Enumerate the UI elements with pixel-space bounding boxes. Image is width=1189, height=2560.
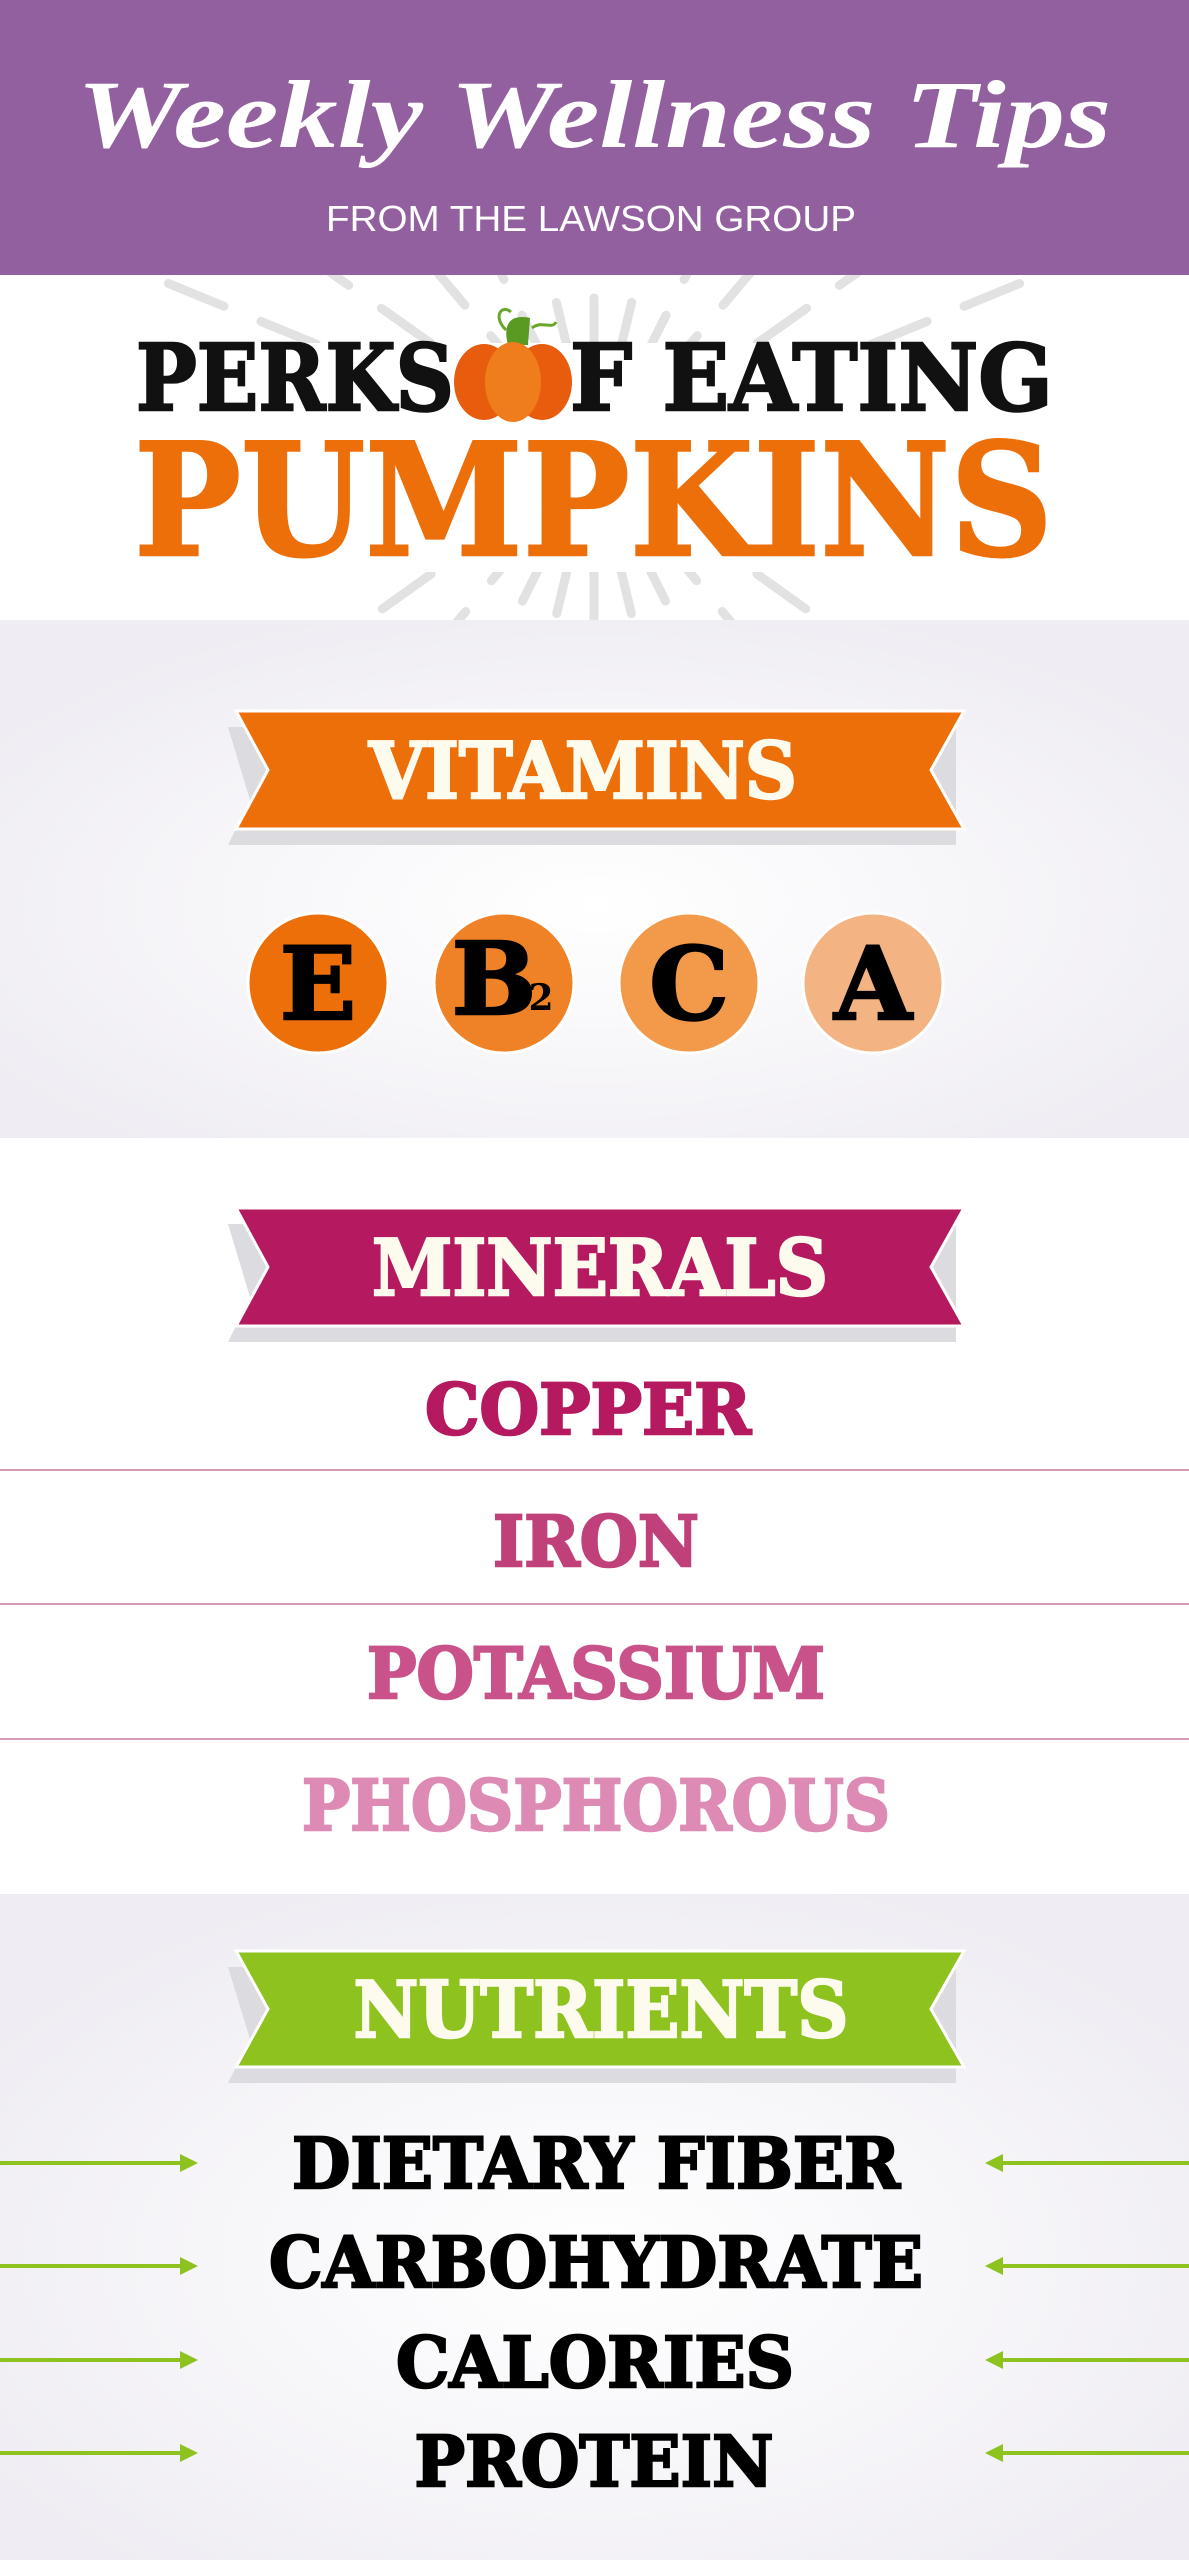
heading: perks of eating: F EATING [570,324,1053,432]
vitamin E [248,913,388,1053]
title: Weekly Wellness Tips [77,61,1111,168]
header band [0,0,1189,275]
icon: pumpkin [454,309,572,422]
vitamin C [619,913,759,1053]
mineral list: POTASSIUM [367,1632,825,1715]
vitamin B2: B [452,920,536,1038]
nutrient list: CARBOHYDRATE [269,2221,923,2304]
panel: minerals [0,1138,1189,1894]
heading: perks of eating [136,309,1053,432]
ribbon: nutrients: NUTRIENTS [354,1965,848,2056]
mineral list: IRON [493,1500,699,1583]
ribbon: minerals: MINERALS [372,1223,828,1314]
vitamin B2 [434,913,574,1053]
subtitle: FROM THE LAWSON GROUP [326,198,856,239]
mineral list: PHOSPHOROUS [302,1764,890,1847]
mineral list [302,1368,890,1847]
vitamin A: A [833,925,913,1043]
arrows [0,2154,1189,2462]
panel: nutrients [0,1894,1189,2560]
decorative rays [164,275,1024,620]
nutrient list: PROTEIN [414,2420,774,2503]
heading: pumpkins: PUMPKINS [134,409,1053,592]
vitamin B2: 2 [528,977,554,1019]
nutrient list: DIETARY FIBER [292,2122,901,2205]
ribbon: minerals [228,1208,964,1342]
ribbon: nutrients [228,1951,964,2083]
nutrient list: CALORIES [396,2321,794,2404]
mineral list: COPPER [425,1368,752,1451]
panel: vitamins [0,620,1189,1138]
vitamin C: C [649,925,729,1043]
ribbon: vitamins [228,711,964,845]
nutrient list [269,2122,923,2503]
vitamin A [803,913,943,1053]
ribbon: vitamins: VITAMINS [368,726,797,817]
vitamin E: E [280,925,356,1043]
heading: perks of eating: PERKS [136,324,454,432]
